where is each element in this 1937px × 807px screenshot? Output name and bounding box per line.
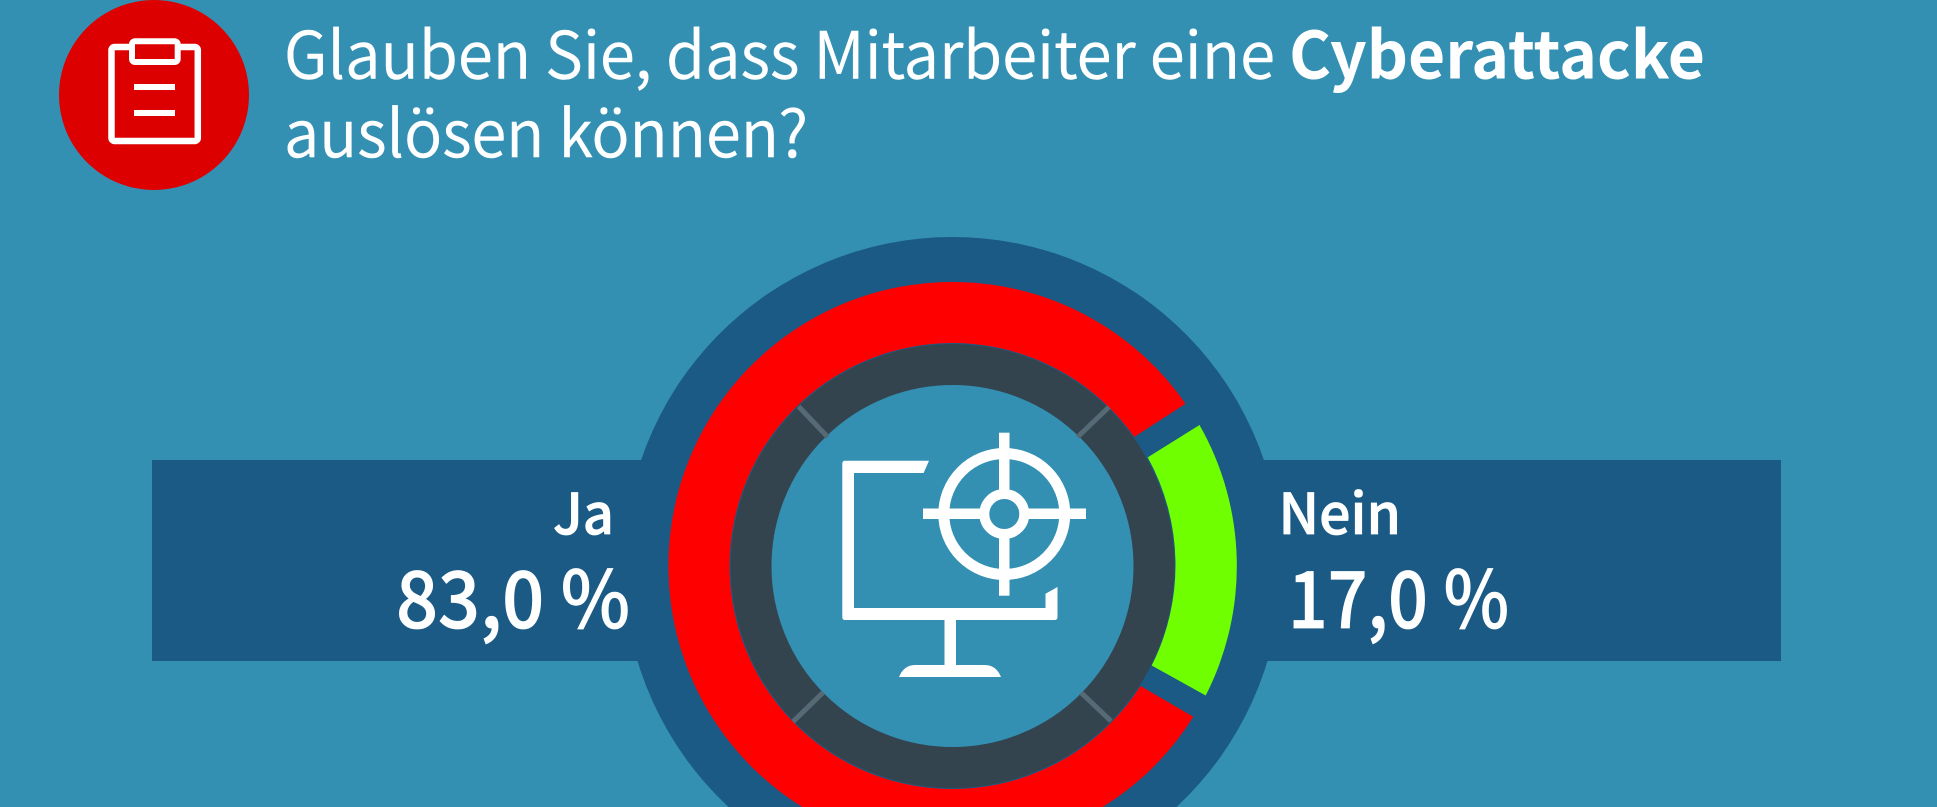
title: Cyberattacke xyxy=(1289,4,1705,98)
segment: Nein 17 % xyxy=(1148,425,1237,696)
panel: Ja / Nein band xyxy=(152,460,1781,661)
title xyxy=(284,4,1705,176)
value: 83,0 %: 83,0 % xyxy=(396,536,630,651)
icon: clipboard badge xyxy=(59,0,249,190)
title: Glauben Sie, dass Mitarbeiter eine xyxy=(284,4,1275,98)
ring ticks xyxy=(793,406,1111,722)
segment: Ja 83 % xyxy=(668,282,1193,807)
icon: monitor with target xyxy=(842,433,1086,677)
label: Ja: Ja xyxy=(553,470,614,551)
outer dark disc xyxy=(624,237,1282,807)
chart: donut 83 / 17 xyxy=(624,237,1282,807)
value: 17,0 %: 17,0 % xyxy=(1288,536,1509,651)
label: Nein: Nein xyxy=(1278,470,1401,551)
inner dark ring xyxy=(751,364,1154,768)
title: auslösen können? xyxy=(284,82,808,176)
